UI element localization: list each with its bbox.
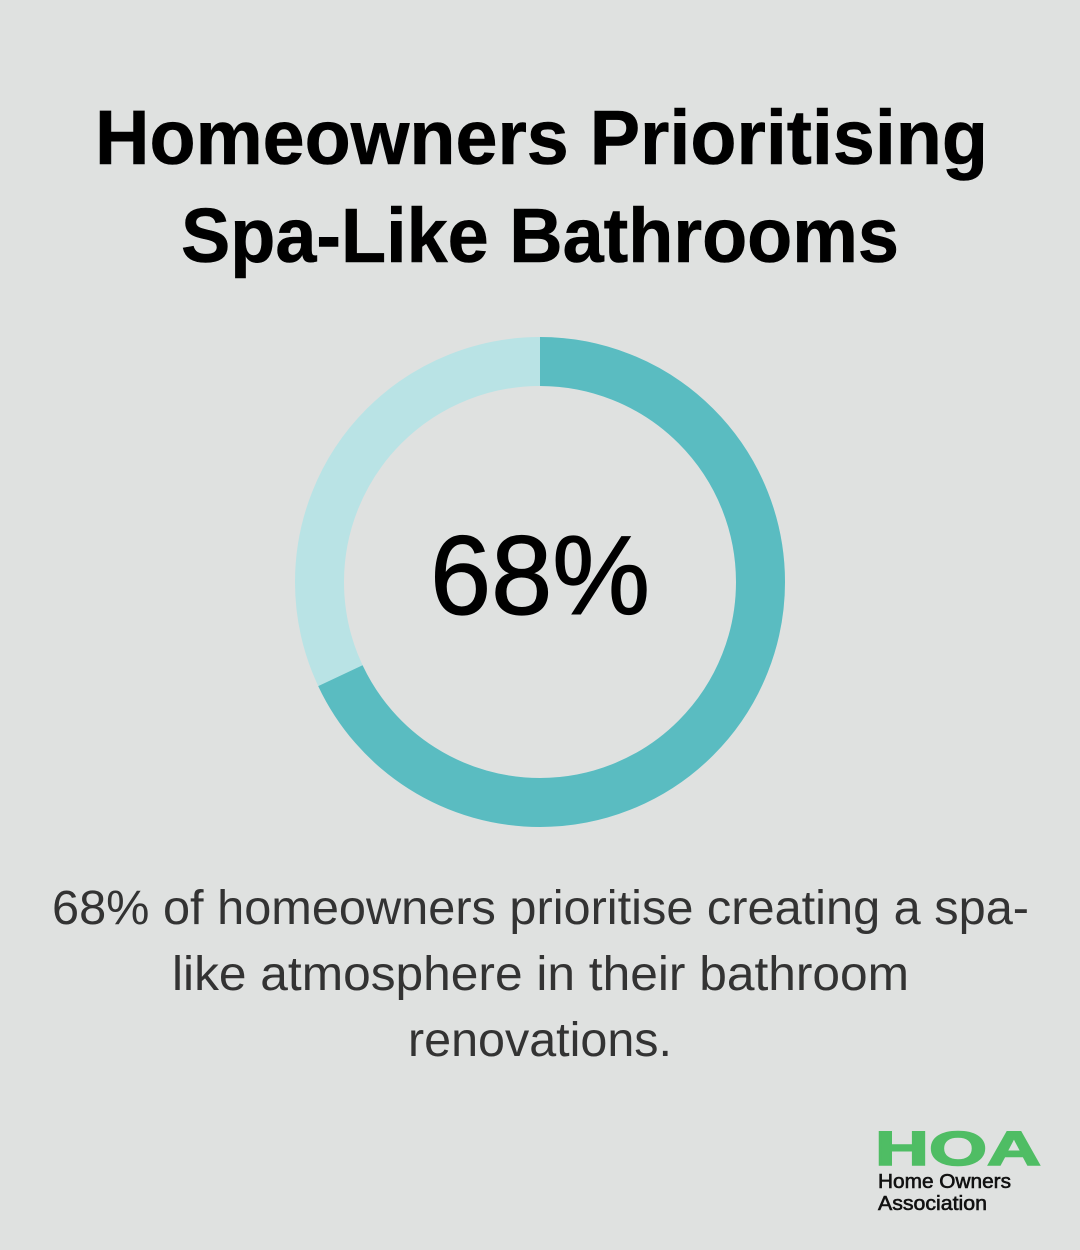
logo: Home Owners Association bbox=[875, 1123, 1041, 1215]
title: Spa-Like Bathrooms bbox=[181, 193, 899, 279]
description text bbox=[52, 882, 1029, 1067]
description text: 68% of homeowners prioritise creating a spa- bbox=[52, 882, 1029, 935]
logo: Home Owners Association: Home Owners bbox=[878, 1171, 1011, 1193]
title bbox=[95, 95, 988, 279]
logo: Home Owners Association: HOA bbox=[875, 1123, 1041, 1176]
description text: like atmosphere in their bathroom bbox=[172, 948, 909, 1001]
description text: renovations. bbox=[408, 1014, 672, 1067]
center value: 68% bbox=[430, 513, 650, 638]
donut chart: 68% bbox=[320, 362, 760, 802]
logo: Home Owners Association: Association bbox=[878, 1193, 987, 1215]
title: Homeowners Prioritising bbox=[95, 95, 988, 181]
